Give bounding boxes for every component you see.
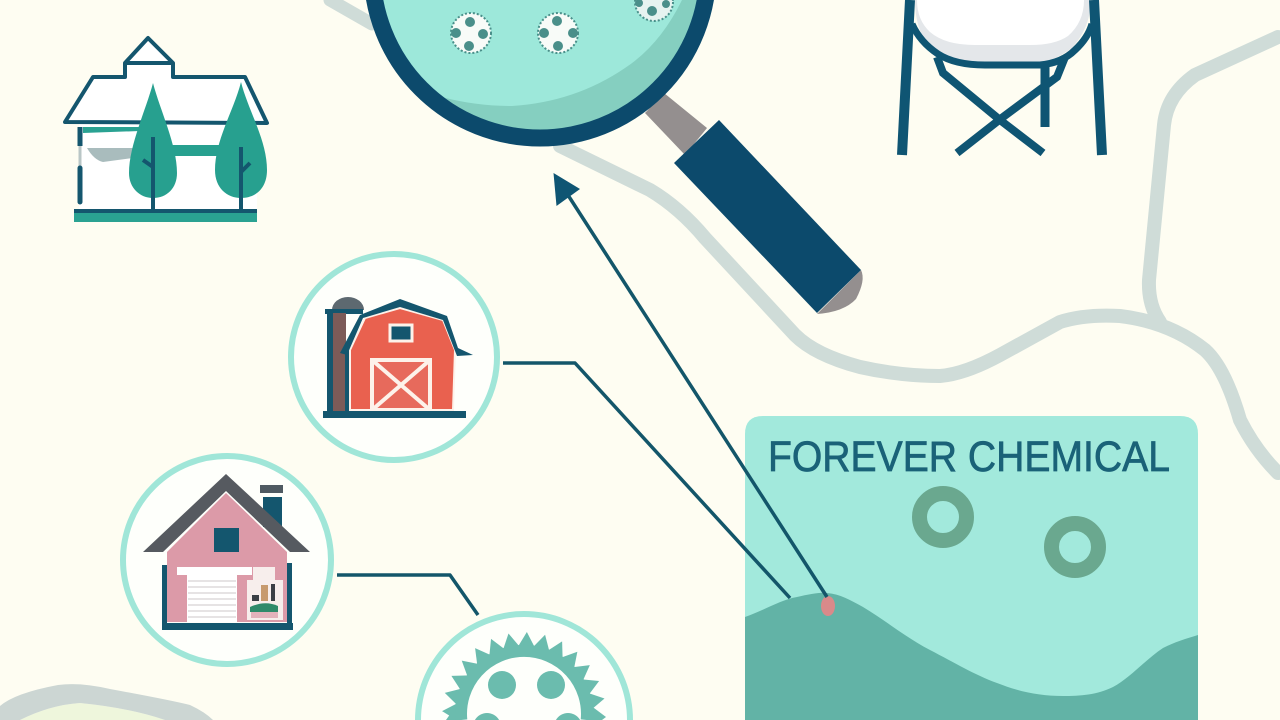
arrow to magnifier	[554, 173, 827, 597]
gear ring	[461, 651, 587, 720]
connector line from barn	[503, 363, 790, 598]
house window	[214, 528, 239, 552]
barn roof	[340, 299, 473, 356]
circle icon: gear	[418, 614, 630, 720]
molecule ring right	[1052, 524, 1098, 570]
particle middle	[538, 13, 578, 53]
lens	[383, 0, 697, 130]
gear holes	[475, 671, 580, 720]
barn window	[390, 325, 412, 341]
flower box	[247, 567, 283, 620]
house posts and ground	[162, 563, 293, 630]
handle neck	[645, 93, 707, 155]
gear teeth	[442, 632, 606, 720]
silo	[325, 297, 364, 411]
heading: forever chemical: FOREVER CHEMICAL	[768, 433, 1170, 481]
contamination point	[821, 596, 835, 616]
garage	[177, 567, 252, 622]
chimney	[260, 485, 283, 527]
barn ground	[323, 411, 466, 418]
barn body	[350, 308, 455, 410]
molecule ring left	[920, 494, 966, 540]
house roof	[143, 474, 310, 552]
handle grip	[674, 120, 861, 313]
barn door	[372, 360, 430, 410]
handle end cap	[817, 270, 863, 314]
magnifying glass	[360, 0, 863, 314]
house wall	[167, 493, 287, 622]
particle right	[635, 0, 673, 21]
lens ring	[372, 0, 708, 138]
connector line from house	[337, 575, 478, 615]
icon: water tower	[902, 0, 1102, 155]
icon: farmhouse with trees	[65, 38, 267, 222]
circle icon: barn	[291, 254, 497, 460]
panel: forever chemical	[745, 416, 1198, 720]
hill	[745, 593, 1198, 720]
circle icon: house	[123, 456, 331, 664]
particle left	[451, 13, 491, 53]
